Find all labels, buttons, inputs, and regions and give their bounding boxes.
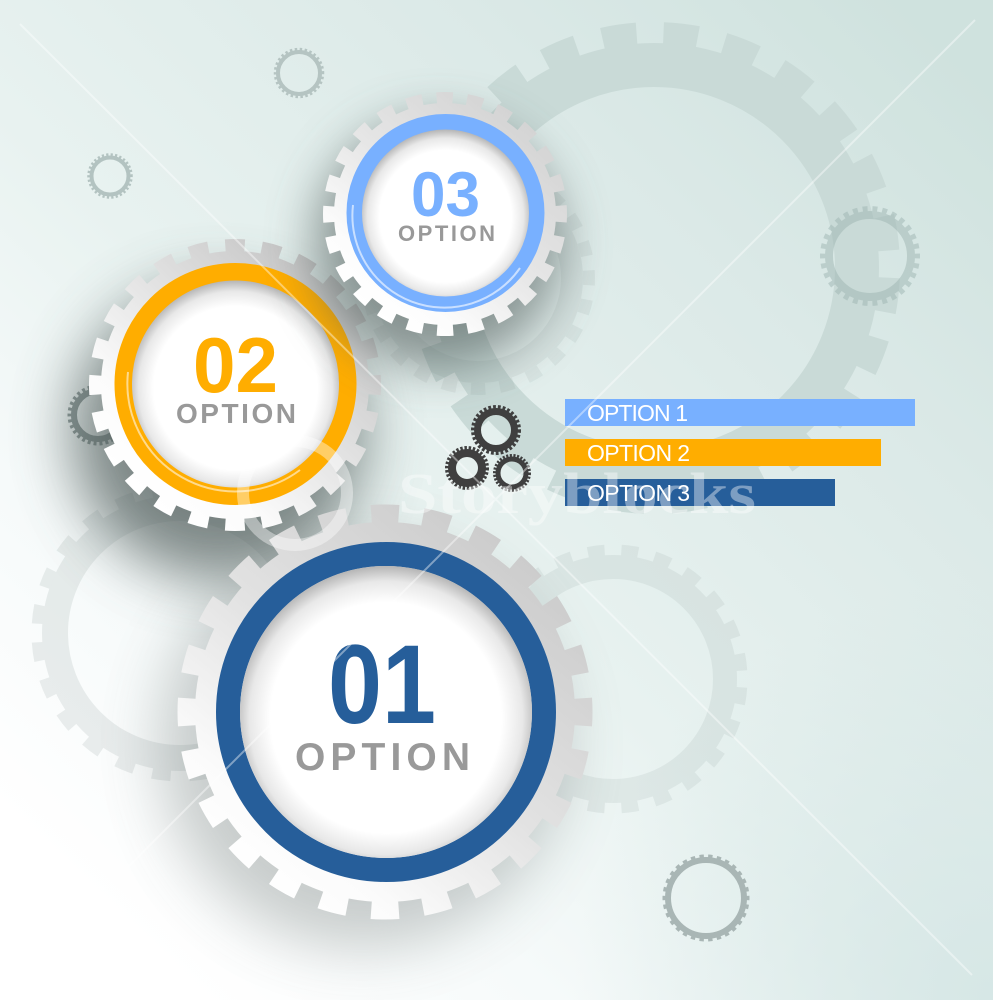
disc: option 2 <box>132 280 339 488</box>
bar: option 3: OPTION 3 <box>587 480 690 506</box>
bar: option 3 <box>565 479 835 506</box>
watermark: Storyblocks <box>398 461 756 526</box>
label: option 2: OPTION <box>176 398 296 429</box>
bar: option 2 <box>565 439 881 466</box>
small gear: top right <box>823 209 917 303</box>
label: option 3: OPTION <box>398 221 495 246</box>
background gear: behind option 3 <box>367 167 589 389</box>
ring highlight: option 2 <box>127 372 300 491</box>
label: option 1: OPTION <box>295 736 470 779</box>
ring: option 1 <box>228 554 544 870</box>
gear: option 1 <box>187 514 583 910</box>
bar: option 1 <box>565 399 915 426</box>
shadow: option 3 gear <box>314 119 562 367</box>
background gear: large top right <box>419 33 889 503</box>
small gear: upper left <box>89 155 131 197</box>
small gear: behind option 2 <box>70 387 126 443</box>
bar: option 1: OPTION 1 <box>587 400 688 426</box>
disc: option 3 <box>362 130 529 296</box>
number 01: 01 <box>328 622 436 747</box>
number 03: 03 <box>411 160 480 230</box>
ring: option 2 <box>124 272 348 496</box>
gear: option 2 <box>96 246 374 524</box>
ring highlight: option 3 <box>352 205 520 308</box>
legend bars <box>565 399 915 506</box>
gear: option 3 <box>329 98 561 330</box>
ring: option 3 <box>354 122 536 304</box>
number 02: 02 <box>193 321 278 409</box>
small gear: top <box>276 50 322 96</box>
background gear: lower right faint <box>484 550 742 808</box>
icon: three small gears <box>447 407 529 490</box>
watermark <box>243 441 756 545</box>
shadow: option 1 gear <box>159 542 565 948</box>
small gear: bottom right <box>665 857 747 939</box>
bar: option 2: OPTION 2 <box>587 440 690 466</box>
disc: option 1 <box>240 566 532 858</box>
shadow: option 2 gear <box>72 286 364 578</box>
background gear: lower left faint <box>37 490 323 776</box>
